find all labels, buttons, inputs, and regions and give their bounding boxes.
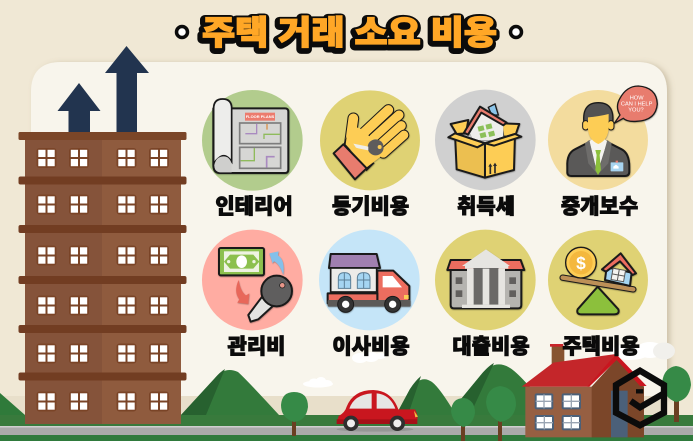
icon: maintenance fee money and key <box>202 230 303 330</box>
house <box>522 344 647 437</box>
landscape: hills, grass and road <box>0 363 693 441</box>
logo watermark <box>616 371 664 425</box>
icon: real estate agent with speech bubble: YOU? <box>628 108 644 114</box>
icon: hand holding key <box>320 90 420 190</box>
panel: cost card <box>31 62 667 398</box>
clouds <box>303 342 675 388</box>
apartment building <box>18 132 186 424</box>
trees <box>281 366 691 441</box>
icon: real estate agent with speech bubble: HOW <box>630 95 644 101</box>
label: interior: 인테리어 <box>215 196 293 218</box>
label: brokerage fee: 중개보수 <box>561 196 638 218</box>
title: 주택 거래 소요 비용 <box>202 14 497 51</box>
icon: balance of coin and house <box>548 230 648 330</box>
icon: floor plans <box>202 90 303 191</box>
icon: moving truck <box>319 230 420 330</box>
label: acquisition tax: 취득세 <box>457 196 515 218</box>
icon: floor plans: FLOOR PLANS <box>246 114 275 119</box>
icon: moving box with house <box>435 90 536 190</box>
label: maintenance fee: 관리비 <box>228 336 285 358</box>
label: housing cost: 주택비용 <box>562 336 640 358</box>
icon: bank building <box>435 230 536 330</box>
label: moving cost: 이사비용 <box>332 336 410 358</box>
label: loan cost: 대출비용 <box>452 336 530 358</box>
arrows: rising prices <box>58 46 149 133</box>
icon: real estate agent with speech bubble: CAN I HELP <box>621 101 653 107</box>
icon: real estate agent with speech bubble <box>548 86 657 190</box>
label: registration cost: 등기비용 <box>332 196 409 218</box>
icon: balance of coin and house: $ <box>576 253 586 273</box>
title: 주택 거래 소요 비용 <box>201 16 496 53</box>
red car <box>337 390 418 432</box>
